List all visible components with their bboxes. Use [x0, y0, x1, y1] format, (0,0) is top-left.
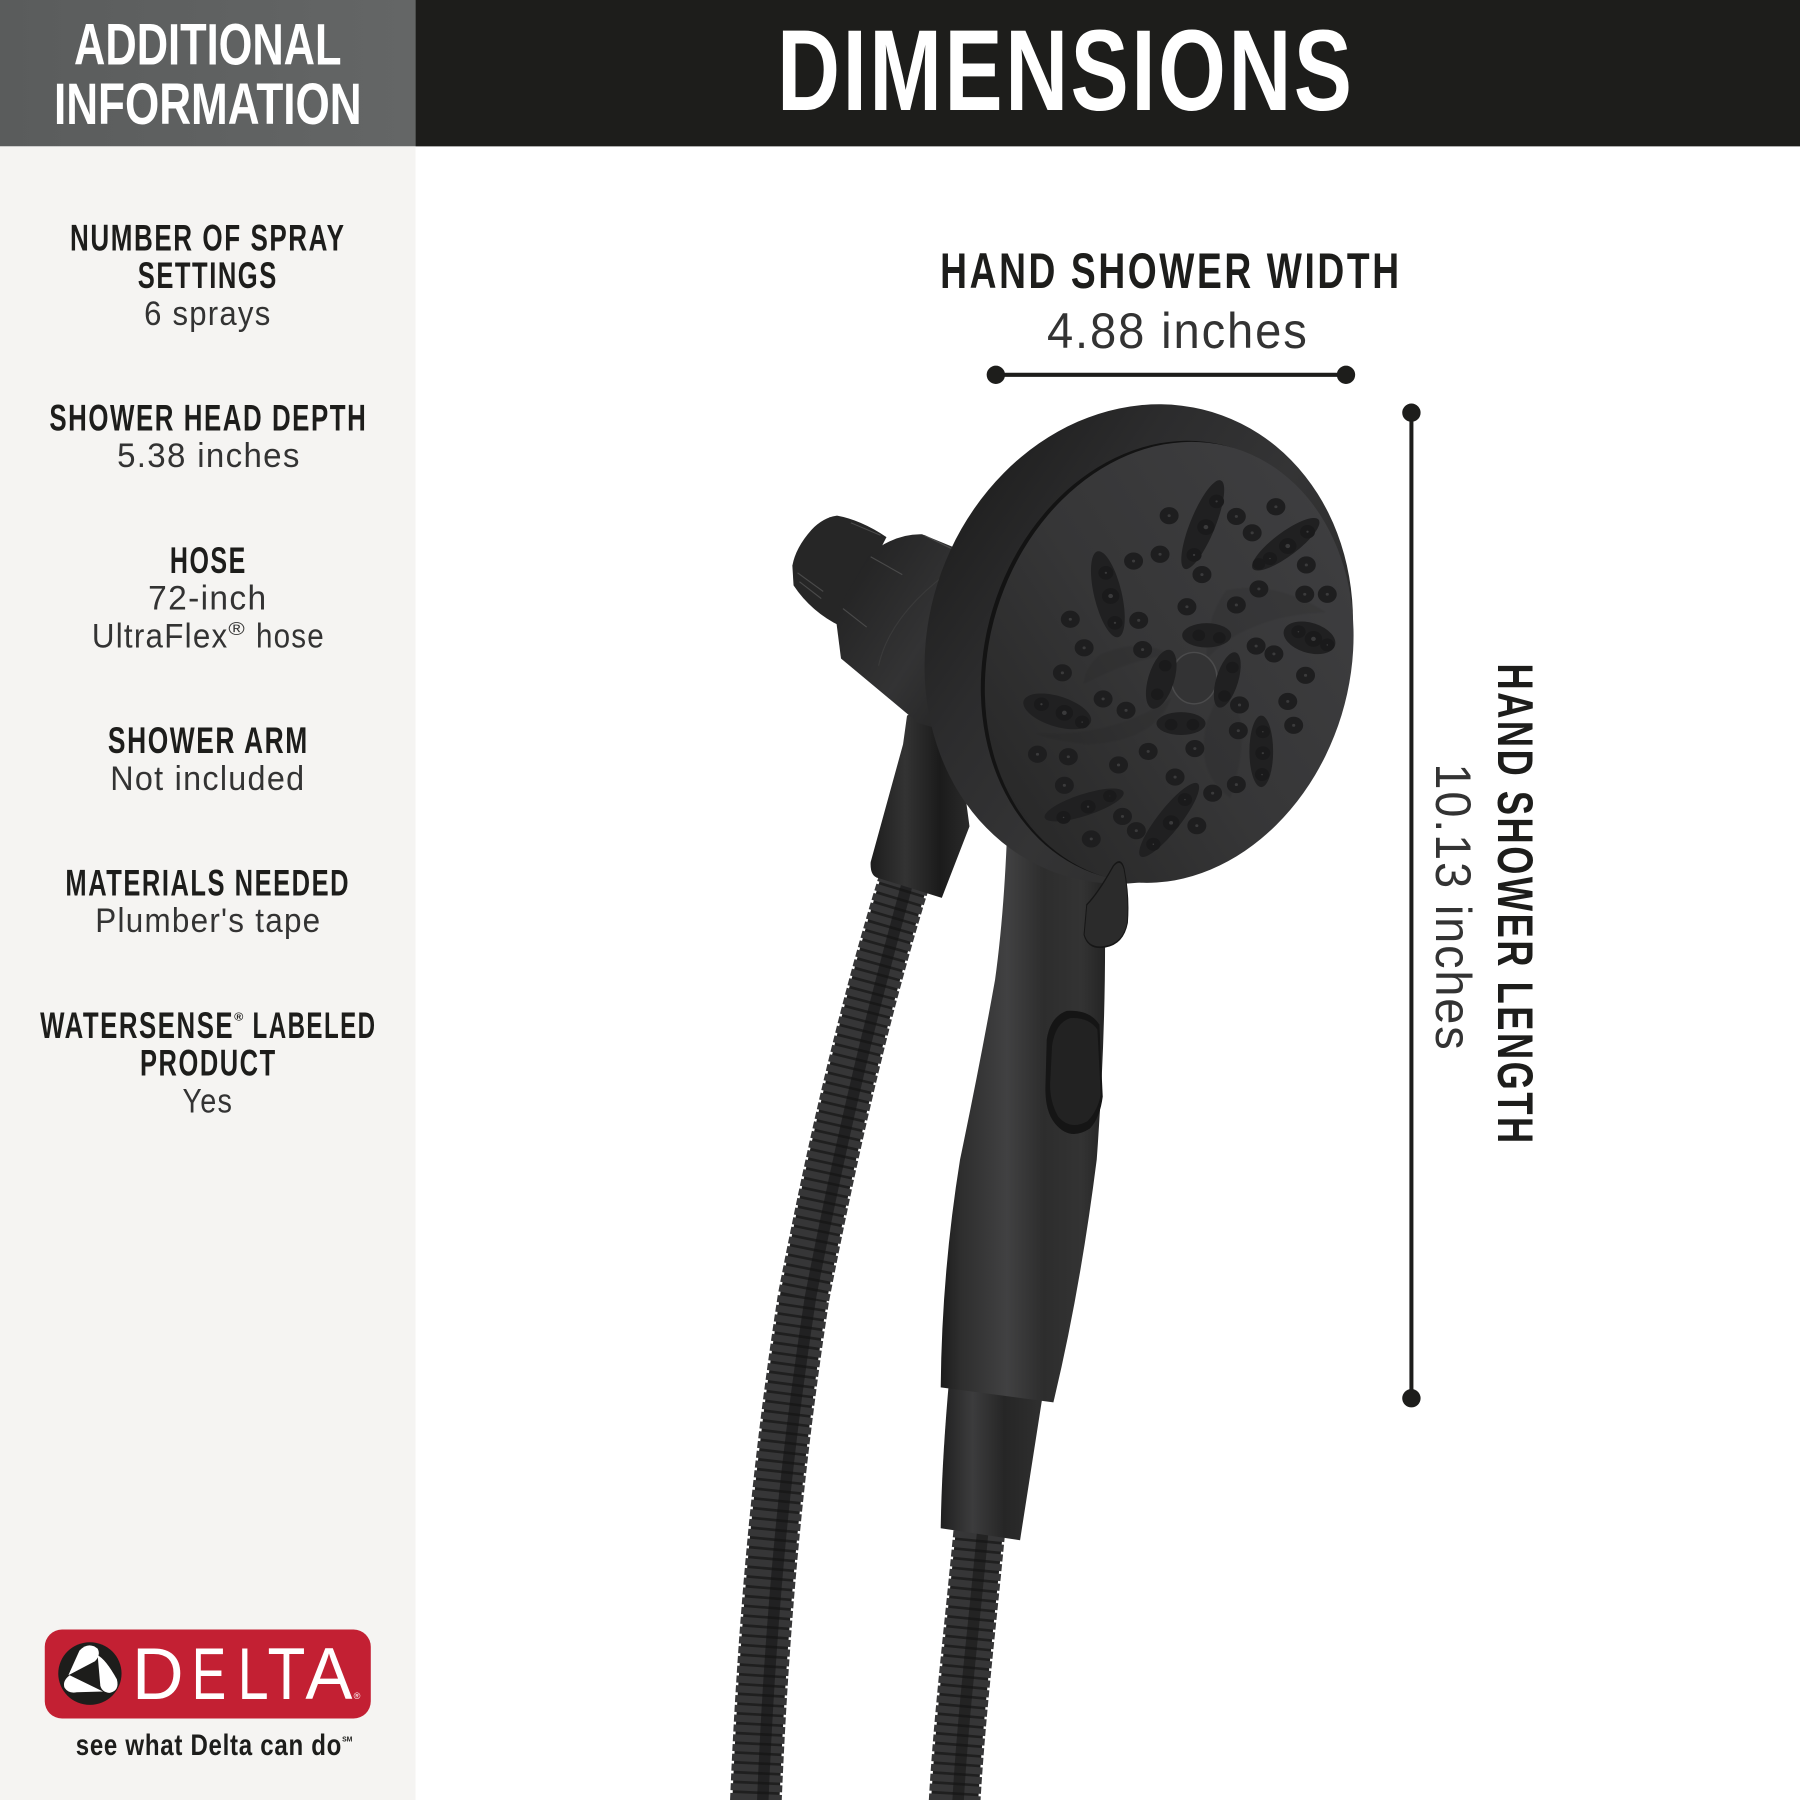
- spec: watersense labeled product: Yes: [183, 1082, 233, 1120]
- mount: arm bracket: [871, 694, 969, 898]
- spec: hose: 72-inch: [148, 580, 267, 618]
- heading: additional information: INFORMATION: [54, 72, 362, 137]
- spec: watersense labeled product: WATERSENSE: [40, 1005, 234, 1046]
- spec: hose: ®: [228, 618, 246, 639]
- dimension: hand shower width: 4.88 inches: [1047, 302, 1309, 359]
- spec: number of spray settings: NUMBER OF SPRAY: [70, 217, 346, 258]
- mount: swivel connector: [792, 516, 966, 737]
- spec: shower arm: [108, 720, 309, 798]
- spec: watersense labeled product: LABELED: [253, 1005, 377, 1046]
- logo wordmark: A: [305, 1632, 352, 1715]
- spray selector clip: [1084, 862, 1128, 947]
- spec: shower arm: Not included: [110, 760, 305, 798]
- spec: hose: [92, 540, 325, 655]
- spec: shower head depth: 5.38 inches: [117, 437, 301, 475]
- spec: watersense labeled product: [40, 1005, 377, 1120]
- pod jets: [1037, 497, 1331, 848]
- spec: number of spray settings: [70, 217, 346, 333]
- spec: shower arm: SHOWER ARM: [108, 720, 309, 761]
- logo wordmark: T: [267, 1632, 305, 1715]
- spec: shower head depth: SHOWER HEAD DEPTH: [49, 397, 367, 438]
- product: matte black hand shower: [755, 343, 1419, 1800]
- logo wordmark: L: [238, 1632, 269, 1715]
- face swirl vanes: [1037, 588, 1325, 798]
- spec: shower head depth: [49, 397, 367, 475]
- spec: hose: UltraFlex: [92, 617, 228, 655]
- head: body shell: [858, 343, 1419, 945]
- single jets: [1032, 502, 1333, 844]
- tagline: SM: [342, 1736, 353, 1743]
- head: rim groove: [927, 394, 1403, 928]
- head: face details: [1018, 476, 1340, 863]
- dimension: hand shower length: [1402, 404, 1544, 1407]
- head: spray face: [931, 396, 1407, 929]
- dimension: hand shower length: HAND SHOWER LENGTH: [1487, 664, 1544, 1146]
- center button: [1171, 652, 1217, 704]
- dimension: hand shower width: [940, 242, 1402, 384]
- heading: additional information: [54, 12, 362, 137]
- dimension: hand shower length: 10.13 inches: [1425, 763, 1482, 1052]
- hose: to mount: [755, 872, 910, 1800]
- spec: number of spray settings: SETTINGS: [138, 255, 278, 296]
- panel: dimensions header: [416, 0, 1800, 146]
- panel: additional information sidebar: [0, 146, 416, 1800]
- dimension: hand shower width: HAND SHOWER WIDTH: [940, 242, 1402, 299]
- spec: hose: hose: [256, 617, 325, 655]
- heading: dimensions: DIMENSIONS: [777, 7, 1355, 135]
- spec: watersense labeled product: ®: [234, 1012, 244, 1024]
- spray pods: [1018, 476, 1340, 863]
- spec: materials needed: [65, 862, 350, 940]
- logo wordmark: E: [192, 1632, 226, 1715]
- tagline: see what Delta can do: [76, 1729, 342, 1762]
- logo: delta: [45, 1630, 371, 1762]
- logo wordmark: [132, 1632, 361, 1715]
- logo wordmark: ®: [354, 1691, 361, 1701]
- heading: additional information: ADDITIONAL: [74, 12, 342, 77]
- spec: materials needed: MATERIALS NEEDED: [65, 862, 350, 903]
- spec: number of spray settings: 6 sprays: [144, 295, 271, 333]
- spec: watersense labeled product: PRODUCT: [140, 1043, 277, 1084]
- spec: materials needed: Plumber's tape: [95, 902, 321, 940]
- logo wordmark: D: [132, 1632, 184, 1715]
- spec: hose: HOSE: [170, 540, 247, 581]
- hose: to handle: [954, 1533, 983, 1800]
- handle: [941, 842, 1107, 1540]
- panel: additional information header: [0, 0, 416, 146]
- icon: delta emblem: [58, 1642, 122, 1705]
